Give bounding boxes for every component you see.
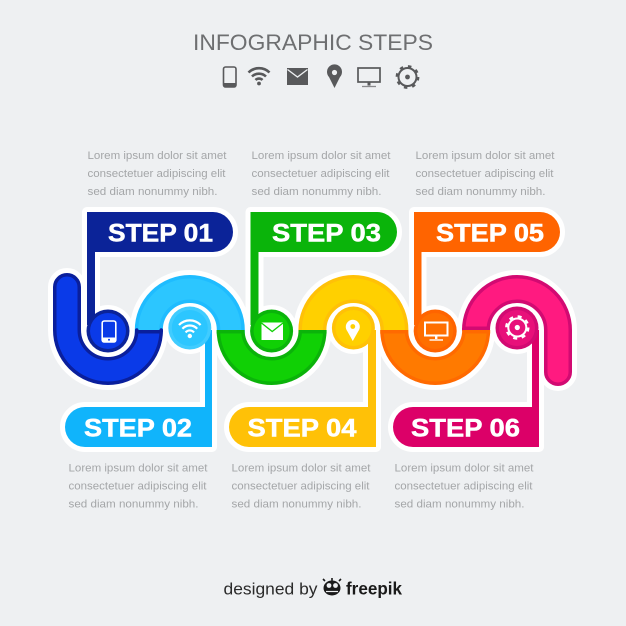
icon circle: mail [250,310,293,352]
icon: bee logo [323,578,341,596]
text block: step 6 [394,462,534,510]
footer credit: freepik [346,578,402,598]
flag: step 04 [229,330,376,447]
icon circle: wifi [168,306,211,350]
text block: step 6: Lorem ipsum dolor sit amet [394,462,534,474]
band: cyan arch [137,277,243,332]
text block: step 5 [416,150,554,198]
icon circle: gear [496,306,538,350]
flag: step 03: STEP 03 [272,220,381,248]
band: blue tail and curve [55,275,161,383]
text block: step 4: sed diam nonummy nibh. [232,498,362,510]
text block: step 1: Lorem ipsum dolor sit amet [88,150,226,162]
flag: step 03 [250,212,397,325]
icon: gear [397,66,418,88]
icon: pin [327,64,342,88]
white outlines behind the path [55,212,570,447]
top icon row [224,64,418,88]
text block: step 2: Lorem ipsum dolor sit amet [68,462,208,474]
text block: step 5: sed diam nonummy nibh. [416,186,546,198]
text block: step 2 [68,462,208,510]
flag: step 01 [87,212,233,325]
text block: step 1: consectetuer adipiscing elit [88,168,226,180]
flag: step 04: STEP 04 [248,414,357,442]
text block: step 3 [252,150,390,198]
title: INFOGRAPHIC STEPS [193,30,433,55]
text block: step 2: consectetuer adipiscing elit [68,480,206,492]
text block: step 4: consectetuer adipiscing elit [232,480,370,492]
band: yellow arch [300,277,407,332]
band: pink arch with tail [464,277,570,384]
icon: mail [287,68,308,85]
footer credit: designed by [224,580,318,598]
text block: step 4: Lorem ipsum dolor sit amet [232,462,370,474]
text block: step 3: consectetuer adipiscing elit [252,168,390,180]
icon circle: phone [86,310,130,352]
text block: step 3: Lorem ipsum dolor sit amet [252,150,390,162]
text block: step 3: sed diam nonummy nibh. [252,186,382,198]
text block: step 1: sed diam nonummy nibh. [88,186,218,198]
flag: step 05 [414,212,560,325]
flag: step 05: STEP 05 [436,220,544,248]
text block: step 5: consectetuer adipiscing elit [416,168,554,180]
text block: step 2: sed diam nonummy nibh. [68,498,198,510]
text block: step 4 [232,462,370,510]
flag: step 02: STEP 02 [84,414,192,442]
footer credit [224,578,402,598]
text block: step 6: sed diam nonummy nibh. [394,498,524,510]
text block: step 5: Lorem ipsum dolor sit amet [416,150,554,162]
icon circle: monitor [414,310,457,352]
text block: step 1 [88,150,226,198]
icon: wifi [248,68,270,85]
icon: monitor [358,68,380,86]
icon circle: pin [332,306,375,350]
text block: step 6: consectetuer adipiscing elit [394,480,532,492]
band: green curve [218,330,325,383]
flag: step 06: STEP 06 [411,414,520,442]
icon: phone [224,67,236,87]
flag: step 01: STEP 01 [108,220,213,248]
flag: step 02 [65,330,212,447]
band: orange curve [382,330,488,383]
flag: step 06 [393,330,539,447]
